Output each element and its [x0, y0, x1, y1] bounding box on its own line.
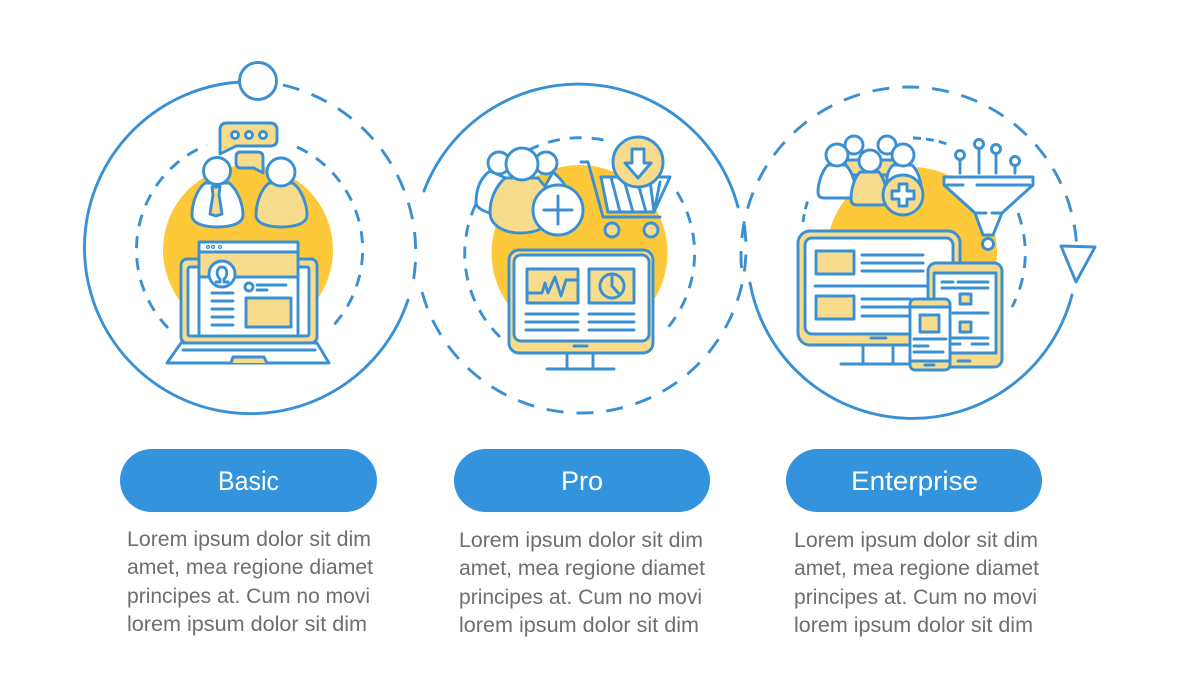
text block: Pro description: amet, mea regione diamet	[459, 557, 705, 580]
panel: pro	[422, 84, 746, 413]
text block: Basic description	[127, 528, 373, 636]
pill: Basic: Basic	[218, 466, 279, 496]
pill: Pro	[454, 449, 710, 512]
arrowhead	[1061, 246, 1095, 282]
yellow disc: enterprise	[827, 167, 997, 337]
text block: Pro description: Lorem ipsum dolor sit dim	[459, 529, 703, 552]
icon: group of people with plus	[476, 148, 583, 235]
text block: Enterprise description: lorem ipsum dolor sit dim	[794, 614, 1033, 637]
icon: desktop monitor	[798, 231, 960, 364]
text block: Pro description	[459, 529, 705, 637]
text block: Basic description: lorem ipsum dolor sit dim	[127, 613, 367, 636]
panel: basic	[84, 62, 416, 414]
outer ring: enterprise	[741, 87, 1076, 418]
inner dashed ring: pro	[465, 138, 695, 337]
icon: two people with speech bubbles	[192, 123, 307, 227]
text block: Pro description: lorem ipsum dolor sit dim	[459, 614, 699, 637]
icon: cart with download arrow	[581, 137, 670, 237]
pill: Pro: Pro	[561, 466, 603, 496]
text block: Basic description: Lorem ipsum dolor sit dim	[127, 528, 371, 551]
outer ring: pro	[422, 84, 746, 413]
icon: monitor dashboard	[509, 250, 653, 369]
icon: filter funnel	[944, 140, 1033, 250]
icon: laptop with profile window	[167, 242, 329, 363]
text block: Basic description: principes at. Cum no movi	[127, 585, 370, 608]
text block: Enterprise description: amet, mea regione diamet	[794, 557, 1039, 580]
pill: Enterprise	[786, 449, 1042, 512]
icon: team with medical cross	[818, 136, 923, 215]
panel: enterprise	[741, 87, 1095, 418]
outer ring: basic	[84, 82, 416, 414]
icon: tablet	[928, 263, 1002, 367]
text block: Enterprise description: principes at. Cum no movi	[794, 586, 1037, 609]
pill: Enterprise: Enterprise	[851, 466, 978, 496]
icon: phone	[910, 299, 950, 370]
yellow disc: basic	[163, 165, 333, 335]
text block: Basic description: amet, mea regione diamet	[127, 556, 373, 579]
text block: Pro description: principes at. Cum no movi	[459, 586, 702, 609]
text block: Enterprise description	[794, 529, 1039, 637]
inner dashed ring: enterprise	[803, 138, 1025, 307]
pill: Basic	[120, 449, 377, 512]
node circle	[240, 62, 276, 100]
yellow disc: pro	[492, 165, 668, 341]
text block: Enterprise description: Lorem ipsum dolor sit dim	[794, 529, 1038, 552]
inner dashed ring: basic	[136, 145, 363, 331]
